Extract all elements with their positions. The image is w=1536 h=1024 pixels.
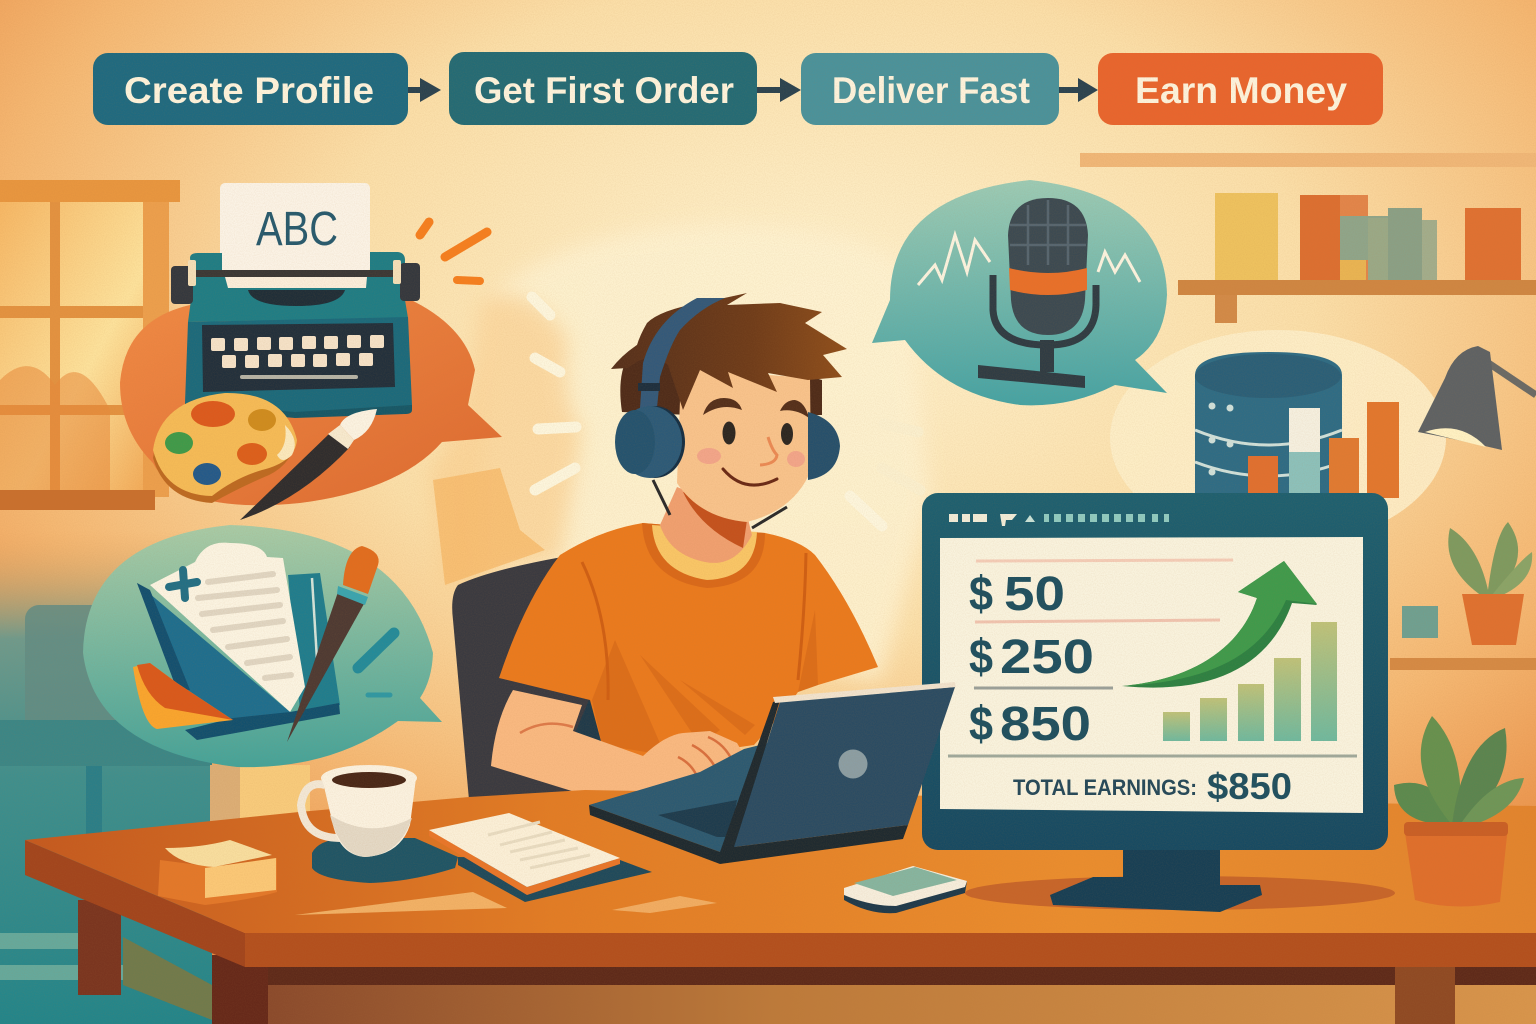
icon: typewriter: ABC — [256, 203, 338, 256]
toolbar icons — [949, 514, 1169, 526]
speech bubble: writing and design — [120, 183, 502, 520]
motion dashes around the person — [532, 297, 560, 372]
laptop — [589, 682, 956, 864]
earnings list: $ — [969, 568, 993, 621]
potted plant on desk — [1394, 716, 1524, 907]
earnings list: 250 — [1000, 631, 1094, 684]
earnings list: $ — [969, 698, 993, 751]
growth arrow — [1122, 561, 1317, 688]
bar chart — [1163, 622, 1337, 741]
face — [677, 370, 811, 522]
icon: folder and document — [133, 543, 340, 740]
arrow 1 — [408, 78, 441, 102]
step: Deliver Fast — [801, 53, 1059, 125]
monitor screen — [940, 537, 1363, 813]
monitor with earnings — [922, 493, 1395, 912]
total earnings: TOTAL EARNINGS: — [1013, 775, 1197, 800]
desk shadow under monitor — [965, 876, 1395, 910]
speech bubble: voice recording — [872, 180, 1167, 405]
step: Earn Money: Earn Money — [1135, 70, 1347, 111]
step: Create Profile: Create Profile — [124, 70, 374, 111]
step: Earn Money — [1098, 53, 1383, 125]
arrow 3 — [1059, 78, 1098, 102]
spark lines — [420, 222, 487, 257]
spark lines — [358, 633, 394, 668]
arrow 2 — [757, 78, 801, 102]
headphone cable — [653, 480, 787, 528]
desk — [25, 790, 1536, 1024]
peach column left of person — [430, 295, 582, 590]
icon: pen brush — [287, 546, 379, 742]
icon: typewriter — [171, 183, 420, 418]
small plant on wall shelf — [1390, 522, 1536, 670]
step: Get First Order — [449, 52, 757, 125]
bookshelf with books — [1178, 193, 1536, 323]
earnings list: 850 — [1000, 698, 1091, 751]
total earnings: $850 — [1207, 766, 1292, 807]
phone — [844, 866, 967, 913]
person with headphones — [491, 293, 878, 795]
earnings list: $ — [969, 631, 993, 684]
right ear cup — [808, 412, 840, 480]
icon: paint brush — [240, 409, 377, 520]
desk lamp — [1418, 346, 1536, 450]
step: Get First Order: Get First Order — [474, 70, 734, 111]
desk chair — [452, 557, 600, 800]
teal sofa and floor on the left — [0, 530, 310, 1024]
monitor body — [922, 493, 1388, 850]
icon: database with bars — [1195, 352, 1399, 500]
coffee cup on coaster — [301, 765, 458, 883]
earnings list — [969, 560, 1233, 751]
pale blob behind database — [1110, 330, 1446, 546]
speech bubble: document editing — [83, 525, 442, 767]
left ear cup — [615, 406, 685, 478]
step: Create Profile — [93, 53, 408, 125]
icon: microphone — [918, 198, 1140, 388]
hair — [611, 293, 847, 410]
total earnings — [1013, 766, 1292, 807]
icon: paint palette — [153, 393, 297, 503]
process flow — [93, 52, 1383, 125]
gap under arm — [575, 700, 610, 750]
earnings list: 50 — [1004, 568, 1065, 621]
shirt collar — [642, 523, 765, 588]
monitor stand — [1050, 845, 1262, 912]
pale arch behind person — [480, 225, 930, 680]
step: Deliver Fast: Deliver Fast — [832, 70, 1030, 111]
neck — [660, 487, 752, 563]
hair back — [620, 340, 822, 415]
notebook — [429, 813, 652, 902]
headphone band — [640, 298, 725, 408]
torso in orange shirt — [499, 523, 878, 760]
arm and hand — [491, 690, 747, 795]
window on left wall — [0, 180, 180, 510]
upper wall shelf — [1080, 153, 1536, 167]
orange paper scrap behind person — [433, 468, 545, 585]
butter block — [158, 840, 277, 905]
